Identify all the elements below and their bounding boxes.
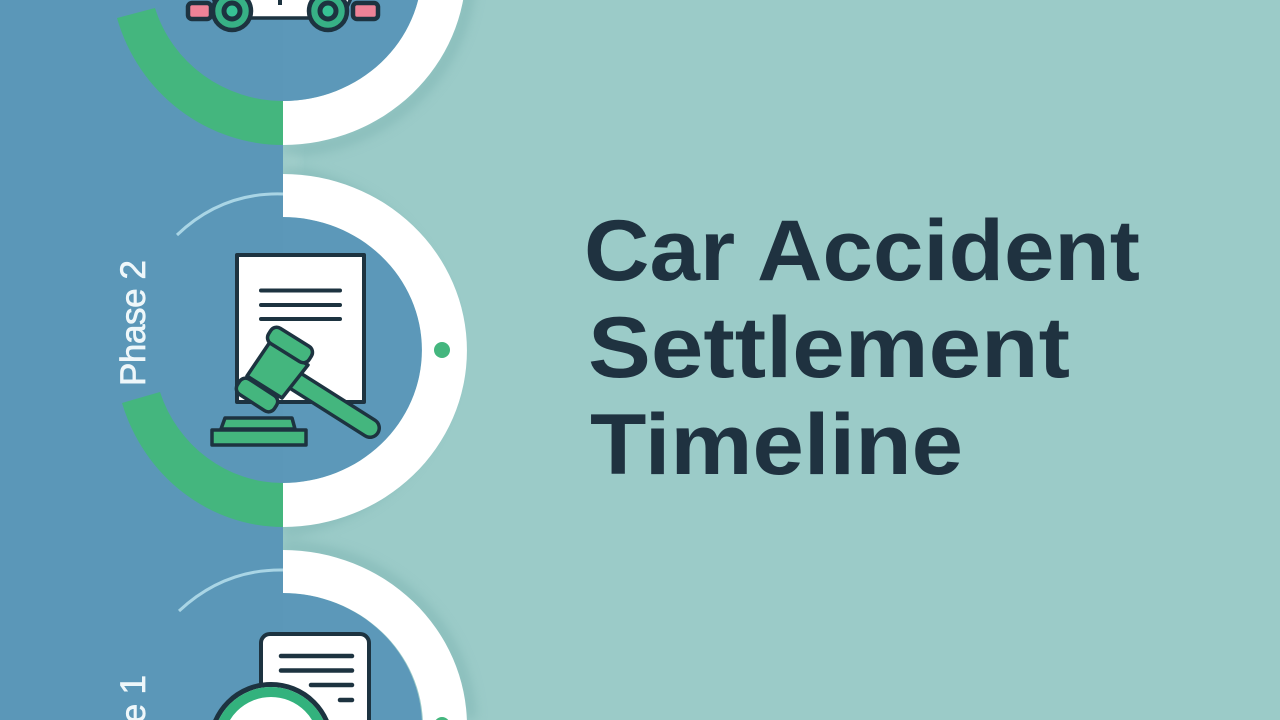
light seam column <box>283 148 299 176</box>
gavel handle <box>291 378 370 428</box>
thin highlight arc <box>179 570 283 611</box>
title <box>584 203 1140 493</box>
right bumper <box>353 3 378 19</box>
white ring <box>283 174 467 527</box>
door mark <box>278 0 282 5</box>
icon: document with gavel <box>212 255 370 445</box>
phase 2 label: Phase 2 <box>114 260 153 386</box>
clock <box>210 684 332 720</box>
icon: car <box>188 0 378 30</box>
ring shadows <box>283 0 470 719</box>
blue disc fill <box>283 0 422 101</box>
phase 1 ring <box>179 550 467 720</box>
ring dot <box>436 717 448 720</box>
thin highlight arc <box>177 194 283 235</box>
white ring arc <box>283 0 466 145</box>
title line 2: Settlement <box>588 300 1070 396</box>
blue disc fill <box>283 217 422 483</box>
white ring <box>283 550 467 720</box>
sound block <box>212 418 306 445</box>
left wheel <box>213 0 251 30</box>
left bumper <box>188 3 211 19</box>
document <box>261 634 369 720</box>
blue disc fill <box>283 593 422 720</box>
document lines <box>281 656 352 700</box>
green progress arc <box>117 8 283 145</box>
icon: document with clock <box>210 634 369 720</box>
phase 3 ring <box>117 0 466 145</box>
document lines <box>261 290 340 319</box>
document <box>237 255 364 402</box>
title line 3: Timeline <box>590 397 963 493</box>
phase 2 ring <box>122 174 467 527</box>
ring dot <box>434 342 450 358</box>
right background panel <box>283 0 1280 720</box>
green progress arc <box>122 392 283 527</box>
gavel bottom cap <box>234 375 280 415</box>
gavel head <box>247 342 308 398</box>
car body <box>212 0 352 18</box>
title line 1: Car Accident <box>584 203 1140 299</box>
gavel top cap <box>265 325 315 365</box>
right wheel <box>309 0 347 30</box>
left background panel <box>0 0 283 720</box>
